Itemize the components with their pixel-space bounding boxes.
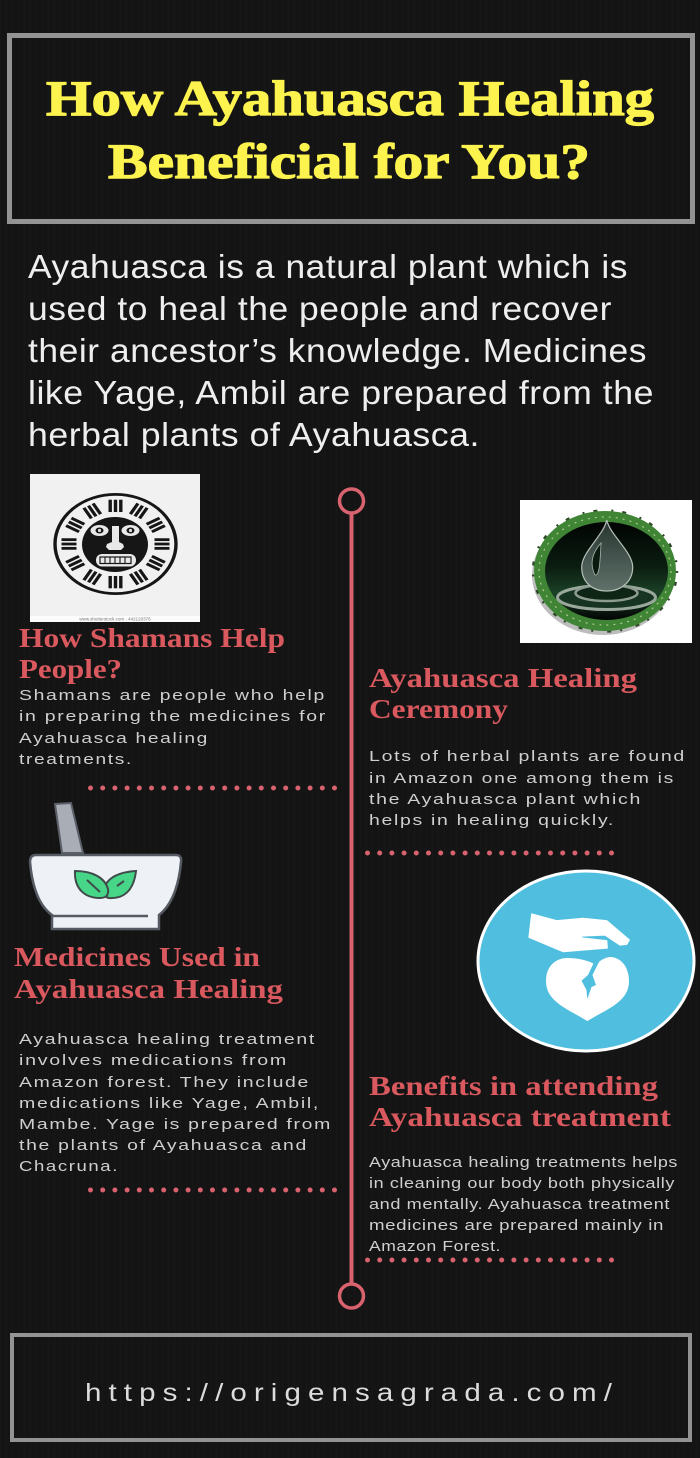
title: Beneficial for You? (108, 133, 590, 189)
body text: Lots of herbal plants are found (369, 748, 686, 765)
heading (19, 623, 285, 684)
heading: Medicines Used in (14, 942, 260, 972)
body text: the plants of Ayahuasca and (19, 1137, 308, 1154)
timeline (340, 489, 364, 1308)
intro paragraph: herbal plants of Ayahuasca. (28, 416, 480, 453)
heading: Ceremony (369, 694, 509, 724)
heading: Ayahuasca Healing (369, 663, 638, 693)
icon: shaman sun mask (30, 474, 200, 622)
body text: Ayahuasca healing (19, 730, 209, 747)
dotted divider (368, 850, 612, 856)
body text: Shamans are people who help (19, 687, 326, 704)
body text (369, 1154, 678, 1255)
section: ayahuasca healing ceremony (369, 663, 686, 829)
heading: Ayahuasca Healing (14, 974, 284, 1004)
intro paragraph: like Yage, Ambil are prepared from the (28, 374, 654, 411)
body text (19, 1031, 332, 1175)
body text (369, 748, 686, 829)
section: medicines used (14, 942, 332, 1175)
body text: Mambe. Yage is prepared from (19, 1116, 332, 1133)
intro paragraph: Ayahuasca is a natural plant which is (28, 248, 628, 285)
intro paragraph (28, 248, 654, 453)
title (46, 70, 654, 189)
icon: hand over broken heart (478, 871, 694, 1051)
body text: in preparing the medicines for (19, 708, 327, 725)
dotted divider (90, 786, 335, 790)
footer url: https://origensagrada.com/ (85, 1379, 619, 1407)
heading (14, 942, 284, 1004)
body text: Amazon forest. They include (19, 1074, 310, 1091)
body text: medicines are prepared mainly in (369, 1217, 664, 1234)
body text: in Amazon one among them is (369, 770, 675, 787)
title box (10, 36, 692, 222)
intro paragraph: their ancestor’s knowledge. Medicines (28, 332, 647, 369)
body text: and mentally. Ayahuasca treatment (369, 1196, 670, 1213)
heading: People? (19, 654, 122, 684)
heading (369, 663, 638, 724)
body text: Ayahuasca healing treatments helps (369, 1154, 678, 1171)
body text: the Ayahuasca plant which (369, 791, 642, 808)
heading: How Shamans Help (19, 623, 285, 653)
icon: shaman sun mask: www.shutterstock.com · 442120376 (79, 616, 151, 622)
body text: Ayahuasca healing treatment (19, 1031, 316, 1048)
heading: Benefits in attending (369, 1071, 659, 1101)
heading: Ayahuasca treatment (369, 1102, 671, 1132)
section: benefits (369, 1071, 678, 1255)
intro paragraph: used to heal the people and recover (28, 290, 612, 327)
body text: in cleaning our body both physically (369, 1175, 675, 1192)
heading (369, 1071, 671, 1132)
section: how shamans help (19, 623, 327, 768)
dotted divider (90, 1188, 335, 1192)
body text (19, 687, 327, 768)
dotted divider (368, 1258, 612, 1262)
icon: mortar and pestle (30, 803, 181, 929)
body text: treatments. (19, 751, 133, 768)
footer box (12, 1335, 690, 1440)
icon: water drop (520, 500, 692, 643)
body text: Chacruna. (19, 1158, 119, 1175)
body text: Amazon Forest. (369, 1238, 501, 1255)
body text: medications like Yage, Ambil, (19, 1095, 320, 1112)
title: How Ayahuasca Healing (46, 70, 654, 126)
body text: involves medications from (19, 1052, 288, 1069)
body text: helps in healing quickly. (369, 812, 615, 829)
